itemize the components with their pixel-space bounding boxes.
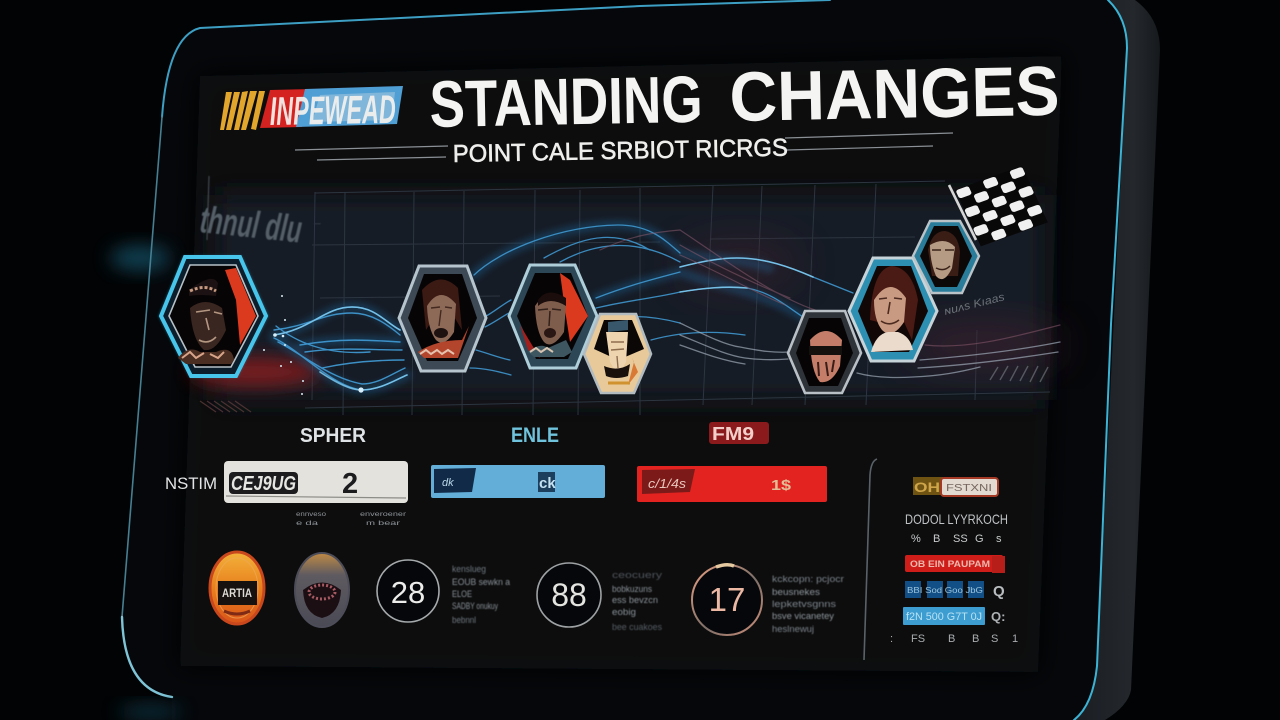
tablet body [122, 0, 1127, 720]
stat text: 17 [772, 574, 844, 634]
blue standing bar: dk [442, 477, 454, 489]
blue glow [274, 225, 803, 390]
stat text: 96: bee cuakoes [612, 622, 662, 632]
results dark blue row: BBI Sod Goo JbG [907, 586, 983, 595]
bright strands [274, 258, 813, 390]
column heading: blue: ENLE [511, 424, 559, 447]
portrait: face [930, 241, 955, 279]
portrait: face [606, 332, 628, 376]
column heading: red [709, 422, 769, 444]
stat text: 96 [612, 570, 663, 632]
stat circle: 17: 17 [709, 581, 745, 618]
pale strands [680, 323, 1060, 378]
results row 1 [911, 533, 1002, 545]
stat text: 28: bebnnl [452, 615, 476, 625]
stat circle: 17 [692, 565, 762, 635]
blue strands after driver 2 [470, 225, 853, 375]
results dark blue row [905, 581, 1005, 600]
blue standing bar: ck [539, 475, 556, 492]
portrait: shoulders [871, 332, 913, 352]
portrait: collar [528, 340, 572, 357]
flag pole [949, 185, 976, 240]
driver hexagon 6 [849, 258, 937, 361]
teal glow at left of tablet [110, 245, 170, 271]
scribble label near top right drivers: ɴuʌs Kıaas [943, 291, 1006, 318]
blue strands left of driver 2 [274, 307, 407, 390]
white standing bar: 2 [342, 468, 358, 500]
results row 2: B [948, 633, 955, 645]
small caption under white bar: m bear [366, 521, 400, 527]
red standing bar: 1$ [771, 477, 792, 494]
driver hexagon 5 [788, 311, 861, 393]
driver hexagon 3 [509, 265, 597, 368]
portrait: face [874, 287, 906, 334]
logo red block [260, 89, 312, 128]
stat text: 96: bobkuzuns [612, 584, 652, 594]
results header badge: FSTXNI [946, 483, 992, 494]
chart axis blurred label: thnul dlu [198, 199, 304, 252]
stat text: 28: ELOE [452, 589, 472, 599]
row label: NSTIM [165, 474, 217, 493]
portrait: face [190, 302, 226, 350]
orange badge: ARTIA [222, 586, 252, 600]
hatching below leader [200, 401, 251, 412]
portrait: red panel [225, 268, 256, 345]
stat text: 28: kenslueg [452, 564, 486, 574]
hatching at right of chart [990, 366, 1048, 382]
results row 1: s [996, 533, 1002, 545]
results light blue row: f2N 500 G7T 0J [906, 611, 982, 623]
stat text: 96: ess bevzcn [612, 595, 658, 605]
subtitle rules left [295, 146, 448, 160]
red glow beneath leader [190, 357, 320, 387]
driver hexagon 7 [913, 221, 979, 293]
portrait: collar [418, 326, 469, 358]
red standing bar: c/1/4s [648, 476, 687, 491]
white standing bar: CEJ9UG [231, 473, 296, 495]
logo stripes [220, 91, 265, 130]
chart axis blurred label [198, 176, 321, 252]
red standing bar [637, 466, 827, 502]
logo blue block [296, 86, 403, 127]
position change wave lines [263, 225, 1060, 395]
divider before results panel [864, 459, 877, 660]
stat circle: 28 [377, 560, 439, 622]
results row 2: B [972, 633, 979, 645]
results light blue row: Q: [991, 609, 1005, 624]
checkered flag [949, 166, 1048, 246]
stat text: 17: heslnewuj [772, 624, 814, 634]
logo text: INPEWEAD [269, 88, 396, 134]
results panel [890, 477, 1018, 645]
portrait: hat [189, 279, 218, 296]
driver hexagon 4 [584, 314, 651, 393]
driver hexagon 2 [399, 266, 486, 371]
chart grid [305, 181, 1050, 415]
stat circle: 96 [537, 563, 601, 627]
tablet side edge [1072, 0, 1160, 720]
stat circle: 28: 28 [391, 575, 425, 610]
subtitle: POINT CALE SRBIOT RICRGS [453, 135, 788, 168]
logo [220, 86, 403, 134]
glow under tablet base [118, 704, 182, 720]
results row 1: SS [953, 533, 968, 545]
white standing bar [224, 461, 408, 503]
results red row: OB EIN PAUPAM [910, 559, 990, 569]
results dark blue row: Q [993, 583, 1005, 600]
small caption under white bar: enveroener [360, 512, 406, 518]
title: first word: STANDING [429, 62, 703, 141]
results table title: DODOL LYYRKOCH [905, 511, 1008, 527]
portrait: hair [870, 266, 918, 340]
results row 2: 1 [1012, 633, 1018, 645]
stat text: 28: SADBY onukuy [452, 601, 498, 611]
stat text: 96: ceocuery [612, 570, 663, 580]
portrait: cap [608, 320, 628, 332]
chart axis blurred label: ---- [314, 221, 321, 227]
results light blue row [903, 607, 1005, 625]
portrait: hair [928, 231, 960, 276]
results header badge [913, 477, 998, 496]
portrait: hair [422, 279, 462, 330]
stat text: 28: EOUB sewkn a [452, 577, 510, 587]
pink strands [600, 230, 1060, 346]
results header badge: OH [914, 479, 940, 495]
small caption under white bar: ennveso [296, 512, 327, 518]
stat text: 28 [452, 564, 510, 625]
portrait: face [810, 331, 842, 382]
portrait: face [535, 295, 566, 344]
driver hexagon 1: leader [159, 256, 268, 377]
small caption under white bar [296, 512, 406, 527]
stat circle: 96: 88 [551, 577, 587, 613]
stat text: 17: kckcopn: pcjocr [772, 574, 844, 584]
results row 2 [890, 633, 1018, 645]
column heading: sphere: SPHER [300, 425, 367, 447]
portrait: face [427, 295, 456, 343]
flag cloth [955, 166, 1048, 246]
column heading: red: FM9 [712, 424, 754, 444]
leader sparkles [263, 295, 364, 395]
subtitle rules right [785, 133, 953, 150]
results row 2: FS [911, 633, 925, 645]
red glow behind right drivers [905, 323, 1065, 367]
helmet badge [295, 553, 349, 627]
tablet cyan outline [122, 0, 1127, 720]
portrait: collar [178, 350, 234, 364]
portrait: red panel [560, 273, 588, 342]
stat text: 17: beusnekes [772, 587, 821, 597]
orange badge [210, 552, 264, 624]
stat text: 17: lepketvsgnns [772, 599, 837, 609]
results row 2: S [991, 633, 998, 645]
title: second word: CHANGES [729, 52, 1060, 136]
results row 1: B [933, 533, 940, 545]
results row 2: : [890, 633, 893, 645]
stat text: 17: bsve vicanetey [772, 611, 835, 621]
blue standing bar [431, 465, 605, 498]
results row 1: G [975, 533, 984, 545]
chart background [215, 195, 1045, 400]
results row 1: % [911, 533, 921, 545]
stat text: 96: eobig [612, 607, 636, 617]
screen panel [180, 56, 1062, 672]
small caption under white bar: e da [296, 521, 319, 527]
results red row [905, 555, 1005, 573]
